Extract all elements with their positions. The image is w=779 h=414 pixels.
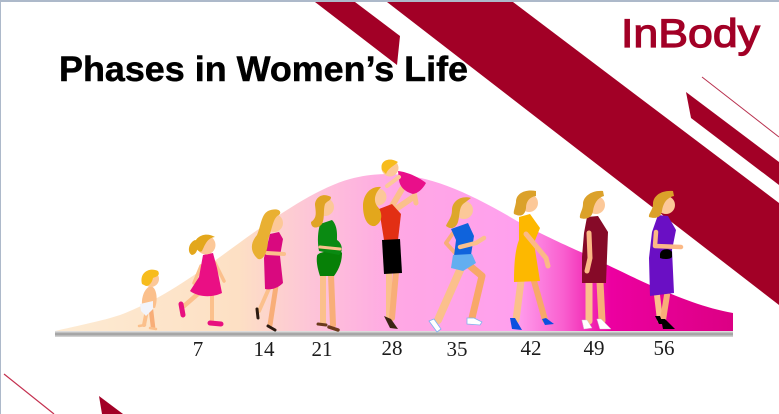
age 42: 42	[520, 336, 542, 360]
decorative triangle: bottom left	[99, 396, 123, 414]
figure: lifted child	[381, 160, 426, 203]
figure: woman age 56 with handbag	[649, 191, 681, 329]
figure: baby	[139, 270, 159, 329]
figure: pregnant woman age 21	[311, 195, 342, 330]
figure: jogging woman age 35	[429, 197, 484, 332]
decorative band: large diagonal	[387, 2, 779, 305]
life-phase bell curve area	[55, 174, 733, 331]
age 56: 56	[654, 336, 674, 360]
age 21: 21	[312, 337, 332, 361]
figure: girl age 7	[181, 235, 224, 324]
figure: woman age 49	[580, 191, 611, 329]
age axis labels	[193, 336, 674, 361]
age 35: 35	[446, 337, 468, 361]
figure: teen age 14	[252, 209, 284, 330]
title: Phases in Women’s Life	[59, 50, 468, 89]
ground line	[55, 331, 733, 337]
decorative band: small top diagonal	[315, 2, 400, 65]
age 28: 28	[382, 336, 402, 360]
age 7: 7	[193, 337, 203, 361]
decorative band: right diagonal	[686, 92, 779, 185]
logo: InBody: InBody	[621, 12, 760, 56]
decorative line: bottom left	[4, 374, 54, 414]
figure: woman age 42	[510, 191, 554, 330]
decorative line: upper right	[702, 77, 779, 137]
age 49: 49	[584, 336, 604, 360]
figure: mother lifting child age 28	[363, 160, 426, 329]
age 14: 14	[254, 337, 275, 361]
